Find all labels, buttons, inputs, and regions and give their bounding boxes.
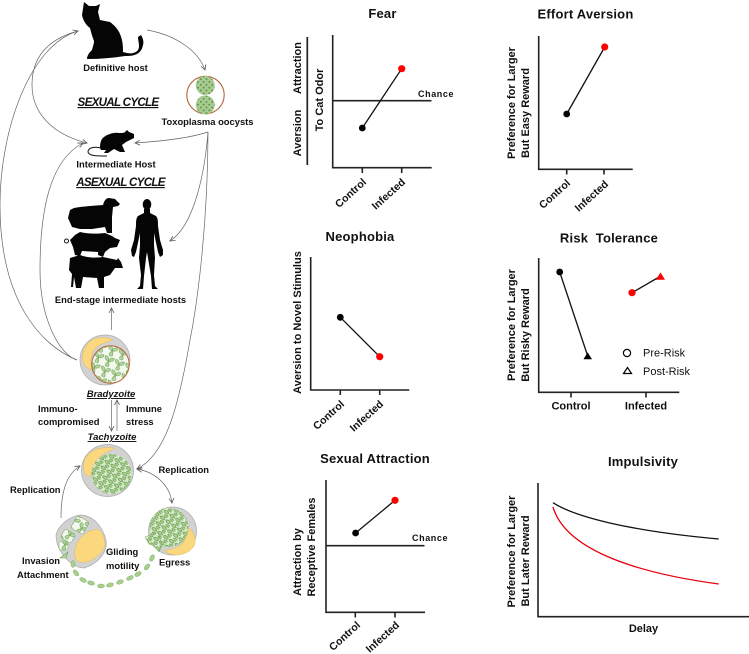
curve: control xyxy=(553,503,719,539)
icon: rat xyxy=(88,130,134,156)
heading: asexual cycle: ASEXUAL CYCLE xyxy=(75,176,167,189)
y label: risk preference: Preference for Larger xyxy=(506,268,518,381)
title: neophobia: Neophobia xyxy=(326,229,395,244)
y label: impulsivity preference: Preference for Larger xyxy=(506,495,518,607)
tick label: infected: Infected xyxy=(573,178,611,214)
heading: sexual cycle: SEXUAL CYCLE xyxy=(78,96,160,109)
icon: pig xyxy=(64,232,120,257)
data: control to infected xyxy=(352,497,399,536)
y label: effort preference: Preference for Larger xyxy=(506,46,518,159)
label: egress: Egress xyxy=(159,556,190,568)
data: control to infected xyxy=(359,65,405,131)
label: replication left: Replication xyxy=(10,484,61,495)
legend: Pre-Risk xyxy=(643,348,686,360)
tick label: control: Control xyxy=(311,398,347,432)
tick label: control: Control xyxy=(537,177,573,211)
chart: fear xyxy=(292,6,454,212)
label: gliding motility: Gliding xyxy=(106,546,138,557)
label: end-stage intermediate hosts: End-stage intermediate hosts xyxy=(55,294,186,305)
label: invasion: Invasion xyxy=(22,555,60,566)
label: immuno-compromised: compromised xyxy=(38,416,100,427)
chart: impulsivity xyxy=(506,454,749,635)
label: bradyzoite: Bradyzoite xyxy=(87,389,136,400)
data: infected xyxy=(628,273,664,296)
axes xyxy=(538,483,749,617)
tick label: control: Control xyxy=(333,176,369,210)
arrows: life cycle connections xyxy=(0,30,208,518)
label: immune stress: Immune xyxy=(126,403,162,414)
legend xyxy=(623,348,691,378)
label: immune stress: stress xyxy=(126,416,154,427)
label: immuno-compromised: Immuno- xyxy=(38,403,78,414)
y label: aversion to novel stimulus: Aversion to Novel Stimulus xyxy=(292,251,304,394)
y label: risky reward: But Risky Reward xyxy=(520,288,532,382)
cell: bradyzoite xyxy=(80,335,130,385)
curve: infected xyxy=(553,507,719,584)
x label: delay: Delay xyxy=(629,623,659,635)
label: chance: Chance xyxy=(418,89,454,99)
y label: to cat odor: To Cat Odor xyxy=(314,68,326,131)
axes xyxy=(326,480,425,618)
panel: toxoplasma life cycle xyxy=(0,2,254,588)
chart: risk tolerance xyxy=(506,230,691,412)
axes xyxy=(539,258,679,398)
chart: neophobia xyxy=(292,229,409,434)
cell: tachyzoite xyxy=(82,444,134,496)
title: impulsivity: Impulsivity xyxy=(608,454,679,469)
y label: receptive females: Receptive Females xyxy=(306,497,318,597)
parasites: gliding motility trail xyxy=(71,554,155,588)
cell: invasion xyxy=(56,515,106,568)
icon: human xyxy=(131,199,163,289)
chart: effort aversion xyxy=(506,6,633,214)
label: intermediate host: Intermediate Host xyxy=(76,158,156,170)
icon: toxoplasma oocyst xyxy=(187,76,224,114)
icon: cat xyxy=(82,2,143,59)
label: attachment: Attachment xyxy=(17,569,69,580)
tick label: control: Control xyxy=(327,619,363,653)
y label: easy reward: But Easy Reward xyxy=(520,68,532,158)
data: control to infected xyxy=(563,43,608,117)
tick label: infected: Infected xyxy=(625,400,667,412)
y label: attraction by: Attraction by xyxy=(292,527,304,596)
data: control xyxy=(556,269,592,359)
axes xyxy=(311,257,409,395)
tick label: infected: Infected xyxy=(370,176,408,212)
icon: cow xyxy=(69,255,123,288)
title: fear: Fear xyxy=(368,6,397,21)
data: control to infected xyxy=(337,314,383,360)
label: chance: Chance xyxy=(412,533,448,543)
tick label: infected: Infected xyxy=(348,398,386,434)
y label: aversion: Aversion xyxy=(292,109,304,156)
title: risk tolerance: Risk Tolerance xyxy=(560,230,658,246)
y label: later reward: But Later Reward xyxy=(520,515,532,607)
label: toxoplasma oocysts: Toxoplasma oocysts xyxy=(161,116,254,127)
icon: sheep xyxy=(68,198,120,233)
label: gliding motility: motility xyxy=(106,560,140,571)
y label: attraction: Attraction xyxy=(292,42,304,94)
title: sexual attraction: Sexual Attraction xyxy=(320,451,430,466)
title: effort aversion: Effort Aversion xyxy=(538,6,633,22)
axes xyxy=(333,35,432,173)
label: definitive host: Definitive host xyxy=(83,62,148,73)
legend: Post-Risk xyxy=(643,366,691,378)
label: replication right: Replication xyxy=(158,464,209,475)
tick label: control: Control xyxy=(551,400,591,412)
axes xyxy=(539,36,633,174)
chart: sexual attraction xyxy=(292,451,448,654)
label: tachyzoite: Tachyzoite xyxy=(88,432,137,443)
cell: egress xyxy=(145,507,196,555)
